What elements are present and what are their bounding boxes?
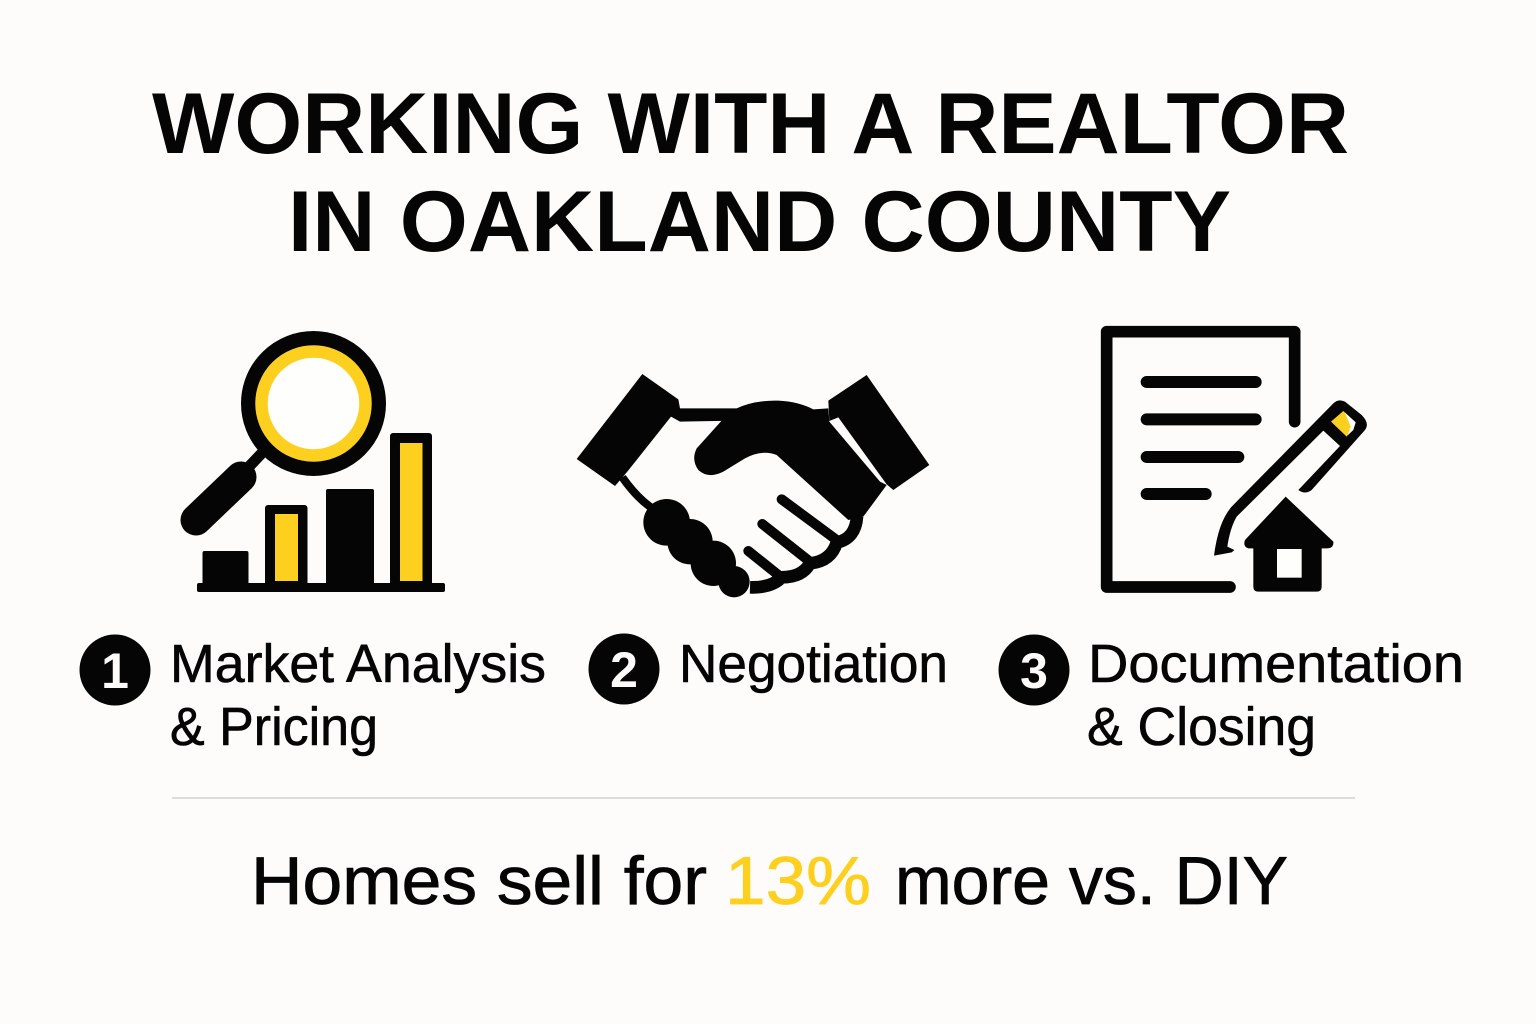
step 2: negotiation <box>588 634 948 704</box>
callout: homes sell for 13% more: more vs. DIY <box>895 843 1288 919</box>
callout: homes sell for 13% more: 13% <box>725 843 871 919</box>
callout: homes sell for 13% more <box>251 843 1288 919</box>
title: IN OAKLAND COUNTY <box>288 174 1231 270</box>
icon: magnifying glass over bar chart <box>196 338 445 592</box>
callout: homes sell for 13% more: Homes sell for <box>251 843 707 919</box>
icon: handshake <box>577 374 929 597</box>
step 2: negotiation: 2 <box>610 642 638 698</box>
step 3: documentation and closing <box>998 634 1464 757</box>
step 1: market analysis and pricing <box>80 634 546 757</box>
step 1: market analysis and pricing: Market Analysis <box>170 634 546 694</box>
step 3: documentation and closing: 3 <box>1020 643 1048 699</box>
title: WORKING WITH A REALTOR <box>152 76 1349 172</box>
step 1: market analysis and pricing: 1 <box>101 643 129 699</box>
step 1: market analysis and pricing: & Pricing <box>170 697 378 757</box>
title <box>152 76 1349 270</box>
icon: document with pencil and house <box>1107 332 1367 592</box>
step 3: documentation and closing: & Closing <box>1087 697 1316 757</box>
step 3: documentation and closing: Documentation <box>1088 634 1464 694</box>
step 2: negotiation: Negotiation <box>679 634 948 694</box>
